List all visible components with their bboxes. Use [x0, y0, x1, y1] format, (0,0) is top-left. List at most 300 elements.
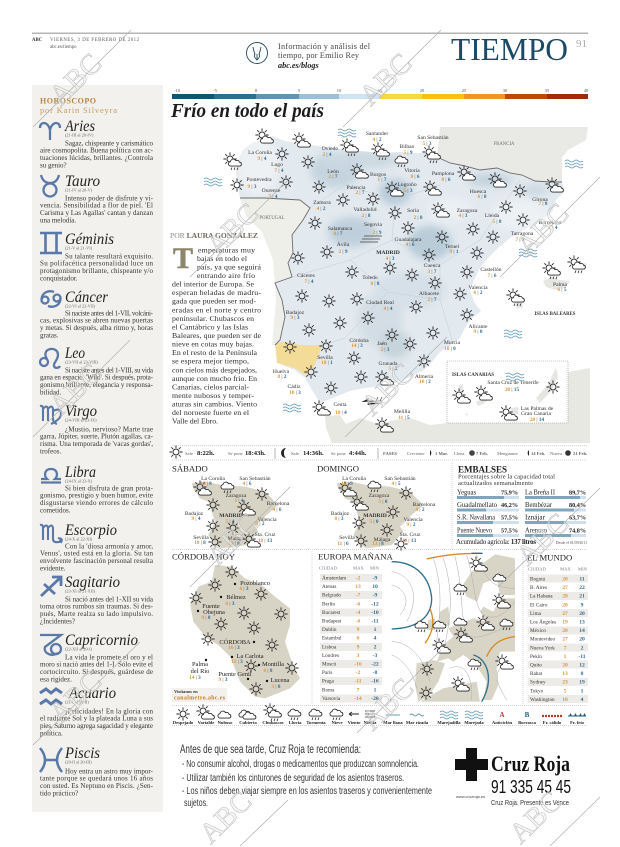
table: the world: 19 — [579, 680, 585, 686]
table: Europe tomorrow: 4 — [374, 636, 377, 642]
temperature colour scale — [172, 88, 589, 99]
city labels with max and min temperatures: 7 | 6 — [488, 273, 497, 279]
city labels with max and min temperatures: Bilbao — [400, 144, 415, 150]
ad text: sujetos. — [184, 798, 208, 809]
article: del noroeste fuerte en el — [172, 408, 250, 417]
table: Europe tomorrow: CIUDAD — [319, 566, 338, 570]
sign: Géminis: Su talante resultará exquisito. — [65, 252, 153, 260]
city labels with max and min temperatures: MADRID — [376, 250, 400, 256]
inset: Canary Islands — [447, 361, 568, 423]
sign: Virgo: Virgo — [65, 403, 97, 420]
region labels: PORTUGAL — [259, 216, 285, 221]
table: Europe tomorrow: Bucarest — [322, 610, 341, 616]
reservoir values: La Breña II — [525, 488, 556, 496]
watermarks: ABC diagonal stamps: ABC — [43, 47, 108, 112]
blog promo: abc.es/blogs — [278, 61, 319, 70]
sign: Libra: (24-IX al 23-X) — [65, 478, 93, 484]
panel: Sunday forecast: 8 | 3 — [335, 516, 344, 522]
table: the world: Washington — [530, 697, 555, 703]
moon phases: FASES — [383, 451, 397, 456]
region labels: ISLAS BALEARES — [535, 312, 576, 317]
table: Europe tomorrow: 3 — [357, 653, 360, 659]
table: the world: 1 — [581, 688, 584, 694]
city labels with max and min temperatures: Huesca — [470, 189, 487, 195]
table: Europe tomorrow: -4 — [356, 610, 361, 616]
weather icons on map — [223, 128, 585, 432]
city labels with max and min temperatures: 10 | 3 — [289, 390, 301, 396]
table: Europe tomorrow: -11 — [354, 679, 362, 685]
sign: Piscis: Hoy entra un astro muy impor- — [65, 767, 154, 775]
moon phases: Creciente — [407, 451, 425, 456]
city labels with max and min temperatures: Badajoz — [286, 310, 305, 316]
panel: Saturday forecast: San Sebastián — [239, 476, 271, 482]
panel: Sunday forecast: 11 | 6 — [337, 541, 349, 547]
sign: Tauro: una melodía. — [40, 217, 76, 225]
table: the world: MAX — [560, 566, 571, 572]
article: Canarias, cielos parcial- — [172, 382, 249, 391]
sea state icons — [204, 129, 583, 412]
sign: Géminis: protagonismo brillante, chispeante y/o — [40, 267, 154, 275]
table: the world: 13 — [579, 620, 585, 626]
temperature colour scale: 20 — [420, 88, 425, 93]
sign: Escorpio: Venus', usted está en la gloria. Su tan — [40, 550, 154, 558]
panel: reservoirs — [456, 464, 587, 546]
city labels with max and min temperatures: 4 | 4 — [384, 306, 393, 312]
city labels with max and min temperatures: 5 | 2 — [389, 366, 398, 372]
sign: Escorpio: (24-X al 22-XI) — [65, 536, 93, 542]
weather icons — [415, 556, 513, 700]
city labels with max and min temperatures: Zamora — [313, 200, 331, 206]
city labels with max and min temperatures: 8 | 6 — [411, 174, 420, 180]
city labels with max and min temperatures: 8 | 8 — [371, 281, 380, 287]
page folio: section, date and web address: VIERNES, 3 DE FEBRERO DE 2012 — [50, 38, 140, 43]
sign: Leo: (23-VII al 23-VIII) — [65, 360, 98, 364]
table: Europe tomorrow: -16 — [354, 662, 362, 668]
legend of weather symbols: Cubierto — [239, 720, 258, 725]
panel: Cordoba today: Fuente — [202, 603, 220, 610]
mini map — [192, 482, 278, 548]
article: el Cantábrico y las Islas — [172, 322, 248, 331]
blog promo: tiempo, por Emilio Rey — [278, 51, 360, 60]
icon: sun — [169, 445, 183, 459]
sign: Tauro: vencia. Sensibilidad a flor de piel. 'El — [40, 202, 153, 210]
city labels with max and min temperatures: 10 | 2 — [419, 379, 431, 385]
moon phases: Menguante — [497, 451, 518, 456]
legend of weather symbols: Nuboso — [218, 720, 233, 725]
city labels with max and min temperatures: Guadalajara — [394, 237, 422, 243]
city labels with max and min temperatures: Girona — [532, 197, 548, 203]
reservoir values: 74,8% — [569, 528, 586, 534]
city labels with max and min temperatures: 5 | 3 — [404, 188, 413, 194]
legend of weather symbols: Mar rizada — [406, 720, 429, 725]
watermarks: ABC diagonal stamps: ABC — [43, 357, 108, 422]
table: the world: 28 — [562, 594, 568, 600]
table: the world: Nueva York — [530, 645, 555, 651]
land masses — [415, 554, 515, 702]
city labels with max and min temperatures: Lleida — [485, 213, 500, 219]
city labels with max and min temperatures: 7 | 4 — [275, 168, 284, 174]
panel: Sunday forecast: Sevilla — [339, 535, 355, 541]
table: Europe tomorrow: Lisboa — [322, 644, 337, 650]
table: the world: 13 — [562, 671, 568, 677]
city labels with max and min temperatures: 11 | 5 — [398, 415, 410, 421]
legend of weather symbols: Lluvia — [289, 720, 302, 725]
sign: Escorpio: evidente. — [40, 564, 66, 572]
city labels with max and min temperatures: Valladolid — [354, 207, 377, 213]
page folio: section, date and web address: abc.es/tiempo — [50, 45, 77, 50]
panel: Saturday forecast: Sevilla — [193, 535, 209, 541]
legend of weather symbols: Anticiclón — [492, 720, 513, 725]
sign: Tauro: Tauro — [65, 173, 100, 190]
panel: reservoirs: Acumulado agrícola: 137 litros — [456, 539, 536, 546]
sign: Capricornio: moro si nació antes del 1-I. Sólo evite el — [40, 661, 153, 669]
city labels with max and min temperatures: Albacete — [419, 291, 439, 297]
sign: Leo — [40, 345, 154, 396]
panel: Saturday forecast: 1 | 4 — [235, 498, 244, 504]
city labels with max and min temperatures: Jaén — [377, 341, 387, 347]
table: the world: El Cairo — [530, 602, 548, 608]
panel: Saturday forecast: MADRID — [219, 513, 243, 519]
table: Europe tomorrow: Praga — [322, 679, 335, 685]
inset: Canary Islands: 20 | 14 — [530, 417, 544, 423]
city labels with max and min temperatures: Sevilla — [317, 355, 333, 361]
blog promo — [246, 42, 371, 70]
sign: Acuario: (21-I al 19-II) — [65, 700, 89, 704]
city labels with max and min temperatures: Alicante — [469, 324, 488, 330]
panel: Saturday forecast: 10 | 8 — [194, 540, 206, 546]
sign: Capricornio: (22-XII al 20-I) — [65, 646, 93, 652]
sign: Aries: su genio? — [40, 162, 67, 170]
legend of weather symbols: Fr. cálido — [543, 720, 562, 725]
reservoir values: S.R. Navallana — [457, 514, 496, 522]
page folio: section, date and web address: ABC — [32, 38, 43, 43]
table: the world: 2 — [581, 645, 584, 651]
city labels with max and min temperatures: Melilla — [394, 409, 411, 415]
sun and moon times strip: Se pone — [331, 451, 346, 456]
logo text and phone — [456, 751, 571, 807]
panel: Sunday forecast: 18 | 13 — [402, 538, 416, 544]
inset: Canary Islands: Las Palmas de — [521, 406, 554, 412]
sign: Cáncer: Cáncer — [65, 289, 109, 306]
table: Europe tomorrow: -12 — [371, 601, 379, 607]
sign: Capricornio — [40, 632, 153, 684]
sign: Escorpio — [40, 522, 154, 572]
table: Europe tomorrow: -16 — [371, 679, 379, 685]
sign: Cáncer — [40, 289, 154, 340]
sun and moon times strip: 4:44h. — [349, 450, 367, 457]
panel: Cordoba today: 6 | 8 — [264, 668, 273, 674]
ad text: - Los niños deben viajar siempre en los asientos traseros y convenientemente — [182, 786, 432, 797]
city labels with max and min temperatures: 2 | 9 — [373, 230, 382, 236]
logo text and phone: www.cruzroja.es — [456, 794, 485, 799]
panel: Sunday forecast: 13 | 8 — [372, 541, 384, 547]
top rule — [32, 32, 588, 34]
inset: Canary Islands: 20 | 15 — [505, 387, 519, 393]
temperature colour scale: -5 — [213, 88, 218, 93]
table: the world: CIUDAD — [528, 566, 547, 572]
sign: Cáncer: (22-VI al 22-VII) — [65, 304, 96, 308]
table: the world: 0 — [581, 671, 584, 677]
table: the world: 20 — [562, 628, 568, 634]
city labels with max and min temperatures: 2 | 9 — [339, 249, 348, 255]
table: Europe tomorrow: -9 — [373, 593, 378, 599]
land: Spain with cold zones — [230, 130, 570, 410]
sign: Géminis: conquistador. — [40, 274, 78, 282]
article: emperaturas muy — [198, 245, 255, 254]
city labels with max and min temperatures: 9 | 1 — [450, 249, 459, 255]
table: Europe tomorrow: Dublín — [322, 627, 337, 633]
sign: Tauro: (21-IV al 20-V) — [65, 188, 93, 192]
table: Europe tomorrow: 2 — [374, 644, 377, 650]
legend of weather symbols: B — [525, 711, 530, 719]
sign: Géminis: Su polifacética personalidad luce un — [40, 260, 154, 268]
sign: Géminis — [40, 231, 154, 282]
panel: Cordoba today: Puente Genil — [218, 671, 252, 678]
isobars — [392, 555, 515, 700]
temperature colour scale: 0 — [255, 88, 258, 93]
ad text: Antes de que sea tarde, Cruz Roja te recomienda: — [180, 744, 361, 756]
reservoir values: 46,2% — [501, 502, 518, 509]
ad text — [180, 744, 432, 809]
table: the world: B. Aires — [530, 585, 547, 591]
table: Europe tomorrow: -2 — [356, 576, 361, 582]
article: entrando aire frío — [197, 271, 255, 280]
inset: Canary Islands: Gran Canaria — [521, 411, 551, 417]
sign: Aries: (21-III al 20-IV) — [65, 132, 94, 138]
panel: Sunday forecast: Zaragoza — [369, 493, 390, 499]
panel: Sunday forecast: Valencia — [403, 517, 423, 523]
table: Europe tomorrow: 6 — [357, 636, 360, 642]
sign: Acuario: el radiante Sol y la plateada Luna a sus — [40, 715, 153, 723]
table: the world: Rabat — [530, 671, 543, 677]
city labels with max and min temperatures: Logroño — [397, 182, 417, 188]
heading: EMBALSES — [458, 464, 507, 474]
table: the world: Montevideo — [530, 637, 555, 643]
city labels with max and min temperatures: 2 | 7 — [329, 174, 338, 180]
region labels — [259, 142, 576, 317]
watermarks: ABC diagonal stamps: ABC — [355, 672, 420, 737]
legend of weather symbols: A — [499, 711, 505, 719]
legend of weather symbols: Tormenta — [306, 720, 326, 725]
panel: Cordoba today: 9 | 8 — [202, 615, 211, 621]
table: the world: 20 — [579, 611, 585, 617]
city labels with max and min temperatures: León — [327, 169, 339, 175]
inset: Canary Islands: Santa Cruz de Tenerife — [487, 379, 539, 386]
table: Europe tomorrow: Atenas — [322, 584, 336, 590]
table: Europe tomorrow: Ámsterdam — [322, 574, 346, 582]
city labels with max and min temperatures: 18 | 1 — [321, 360, 333, 366]
city labels with max and min temperatures: Tarragona — [511, 231, 534, 237]
article: nieve en cotas muy bajas. — [172, 340, 254, 349]
table: Europe tomorrow: Estambul — [322, 636, 342, 642]
table: the world: Quito — [530, 662, 542, 668]
article: eradas en el norte y centro — [172, 305, 261, 314]
logo text and phone: 91 335 45 45 — [491, 777, 571, 797]
panel: Cordoba today: 6 | 3 — [240, 586, 249, 592]
panel: Cordoba today: 14 | 3 — [189, 675, 201, 681]
table: the world: Tokyo — [530, 688, 544, 694]
sign: Cáncer: y metas. Si después, alba ritmo y, horas — [40, 324, 153, 332]
city labels with max and min temperatures: Segovia — [364, 222, 383, 228]
watermarks: ABC diagonal stamps: ABC — [355, 357, 420, 422]
table: the world: México — [530, 628, 546, 634]
table: the world: 27 — [562, 585, 568, 591]
panel: Saturday forecast — [172, 464, 290, 549]
table: the world: Bogotá — [530, 576, 546, 582]
panel: Saturday forecast: 12 | 8 — [228, 541, 240, 547]
city labels with max and min temperatures: Cádiz — [287, 384, 301, 390]
city labels with max and min temperatures: 9 | 3 — [248, 184, 257, 190]
panel: Saturday forecast: Zaragoza — [226, 493, 247, 499]
panel: Sunday forecast: MADRID — [363, 513, 387, 519]
city labels with max and min temperatures: 2 | 7 — [428, 297, 437, 303]
table: Europe tomorrow: Roma — [322, 687, 335, 693]
sign: Virgo: (24-VIII al 23-IX) — [65, 418, 97, 422]
panel: Sunday forecast: Badajoz — [331, 511, 350, 517]
temperature colour scale: 40 — [584, 88, 589, 93]
sign: Leo: Leo — [64, 345, 85, 362]
panel: Saturday forecast: 9 | 4 — [192, 516, 201, 522]
table: the world: 23 — [562, 680, 568, 686]
panel: Saturday forecast: 18 | 13 — [258, 538, 272, 544]
table: the world: 4 — [581, 697, 584, 703]
city labels with max and min temperatures: Murcia — [444, 340, 461, 346]
table: the world: 9 — [581, 602, 584, 608]
table: Europe tomorrow: -10 — [371, 610, 379, 616]
reservoir values: 75,9% — [501, 490, 518, 496]
panel: Cordoba today: CÓRDOBA — [219, 638, 251, 646]
panel: Saturday forecast: Barcelona — [267, 501, 290, 507]
city labels with max and min temperatures: 9 | 0 — [474, 329, 483, 335]
panel: Cordoba today: 3 | 8 — [272, 684, 281, 690]
city labels with max and min temperatures: Santander — [366, 131, 388, 137]
panel: Cordoba today: Lucena — [271, 677, 290, 684]
table: Europe tomorrow: -6 — [356, 601, 361, 607]
temperature colour scale: -10 — [174, 88, 181, 93]
table: Europe tomorrow: -14 — [354, 696, 362, 702]
region labels: FRANCIA — [493, 142, 515, 147]
moon phases: Llena — [454, 451, 464, 456]
callout: website: canalmetro.abc.es — [174, 696, 226, 702]
table: the world: 27 — [562, 637, 568, 643]
city labels with max and min temperatures: 2 | 8 — [362, 213, 371, 219]
sign: Sagitario: toma otros rumbos sin traumas. Si des- — [40, 603, 154, 611]
moon phases — [383, 450, 587, 456]
city labels with max and min temperatures: Barcelona — [539, 220, 562, 226]
watermarks: ABC diagonal stamps: ABC — [200, 197, 265, 262]
sun and moon times strip: Sale — [185, 451, 193, 456]
sign: Piscis: (20-II al 20-III) — [65, 760, 92, 764]
watermarks: ABC diagonal stamps: ABC — [43, 665, 108, 730]
watermarks: ABC diagonal stamps: ABC — [510, 197, 575, 262]
city labels with max and min temperatures: Ourense — [262, 188, 281, 194]
panel: Sunday forecast: 4 | 5 — [392, 481, 401, 487]
map: Europe fronts and isobars — [392, 553, 515, 702]
panel: Cordoba today — [172, 552, 300, 702]
reservoir values: Puente Nuevo — [457, 526, 492, 534]
table: Europe tomorrow: -9 — [373, 576, 378, 582]
legend of weather symbols: Nieve — [332, 720, 342, 725]
city labels with max and min temperatures: 5 | 8 — [493, 219, 502, 225]
sign: Leo: gana en espacio. 'Wild'. Si después, prota- — [40, 374, 154, 382]
sign: Acuario: Acuario — [68, 685, 116, 702]
panel: Sunday forecast: 4 | 2 — [416, 507, 425, 513]
watermarks: ABC diagonal stamps: ABC — [510, 507, 575, 572]
bars — [457, 496, 586, 537]
table: the world — [527, 552, 588, 703]
city labels with max and min temperatures: 7 | 4 — [549, 225, 558, 231]
watermarks: ABC diagonal stamps: ABC — [353, 47, 418, 112]
advertisement: Cruz Roja — [180, 744, 571, 809]
city labels with max and min temperatures: Córdoba — [349, 338, 369, 344]
sun and moon times strip: Sale — [291, 451, 299, 456]
sign: Leo: bilidad. — [40, 388, 61, 396]
table: Europe tomorrow: Belgrado — [322, 593, 341, 599]
reservoir values — [457, 488, 586, 534]
temperature colour scale: 15 — [378, 88, 383, 93]
table: the world: MIN — [578, 566, 588, 572]
city labels with max and min temperatures: Ceuta — [333, 402, 347, 408]
table: Europe tomorrow — [318, 552, 393, 702]
city labels with max and min temperatures: 3 | 7 — [428, 269, 437, 275]
sign: Libra: gonismo, prestigio y buen humor, evite — [40, 492, 153, 500]
reservoir values: Iznájar — [525, 514, 546, 522]
table: Europe tomorrow: Londres — [322, 653, 339, 659]
heading: CÓRDOBA HOY — [172, 552, 236, 562]
sign: Tauro: Carisma y Las Agallas' cantan y danzan — [40, 209, 154, 217]
sign: Sagitario — [40, 574, 154, 626]
panel: Saturday forecast: Málaga — [228, 536, 245, 542]
sign: Virgo: trofeos. — [40, 447, 61, 455]
icon: pen nib — [246, 42, 268, 64]
sign: Acuario: ¡Felicidades! En la gloria con — [65, 707, 154, 715]
sign: Piscis: tido práctico? — [40, 789, 78, 797]
table: the world: Los Ángeles — [530, 618, 556, 626]
table: the world: 12 — [579, 662, 585, 668]
table: the world: 20 — [562, 662, 568, 668]
fronts — [392, 553, 515, 702]
city labels with max and min temperatures: 10 | 4 — [335, 410, 347, 416]
city labels with max and min temperatures: Pamplona — [432, 171, 455, 177]
panel: horoscope — [32, 85, 163, 812]
city labels with max and min temperatures: 4 | 2 — [373, 137, 382, 143]
sun and moon times strip: 18:43h. — [245, 450, 266, 457]
moon phases: Nueva — [550, 451, 562, 456]
land: France — [437, 127, 588, 182]
moon phases: 21 Feb. — [573, 451, 587, 456]
sign: Escorpio: envolvente fascinación personal resulta — [40, 557, 154, 565]
sun and moon times strip: 14:36h. — [303, 450, 324, 457]
sign: Cáncer: gratas. — [40, 331, 59, 339]
city labels with max and min temperatures: 8 | 6 — [442, 177, 451, 183]
article: bajas en todo el — [197, 254, 248, 263]
city labels with max and min temperatures: Castellón — [480, 267, 502, 273]
table: Europe tomorrow: -22 — [371, 662, 379, 668]
panel: Cordoba today: La Carlota — [236, 653, 264, 660]
sign: Aries: tuaciones lúcidas, brillantes. ¿Controla — [40, 154, 154, 162]
panel: reservoirs: actualizados semanalmente — [458, 480, 533, 487]
table: the world: 20 — [579, 637, 585, 643]
title: Frío en todo el país — [170, 101, 324, 122]
sign: Aries: Sagaz, chispeante y carismático — [65, 139, 154, 147]
reservoir values: 80,4% — [569, 502, 586, 509]
moon phases: 7 Feb. — [476, 451, 488, 456]
land: Portugal — [240, 198, 310, 345]
city labels with max and min temperatures: San Sebastián — [417, 135, 449, 141]
icon: wind arrow — [362, 397, 382, 405]
sign: Capricornio: La vida le promete el oro y el — [65, 653, 153, 661]
table: Europe tomorrow: 1 — [374, 687, 377, 693]
